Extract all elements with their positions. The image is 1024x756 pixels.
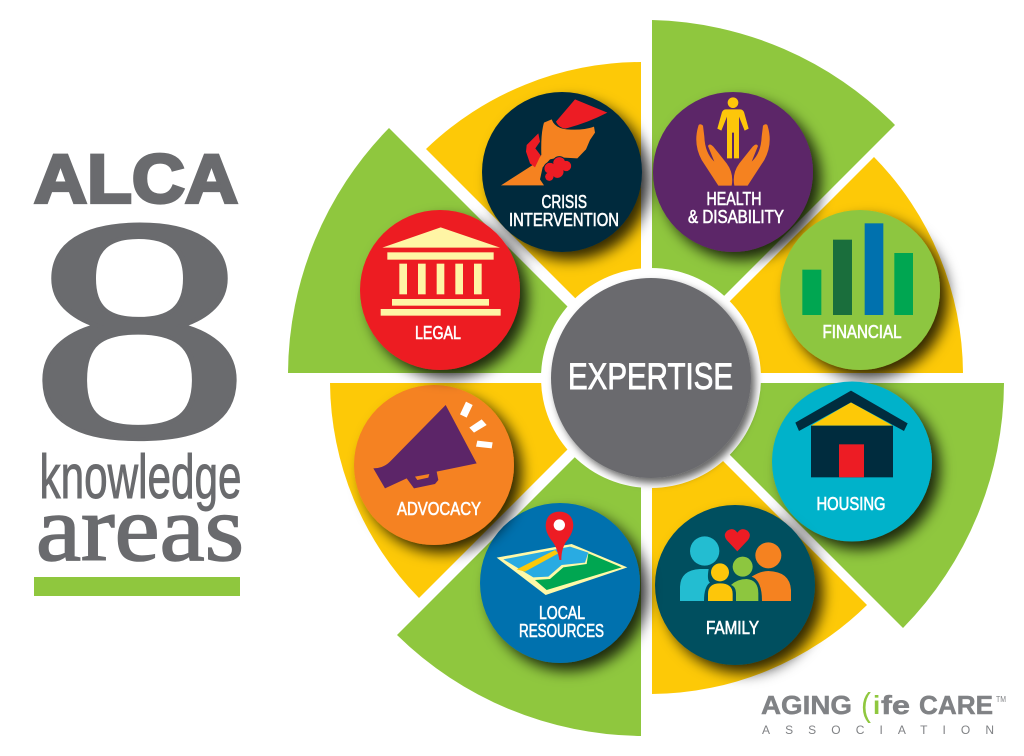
label: CRISIS bbox=[542, 192, 587, 212]
icon: map with pin bbox=[497, 512, 627, 595]
panel: advocacy bbox=[354, 385, 514, 545]
logo: Aging Life Care Association bbox=[761, 686, 1006, 737]
center hub: expertise bbox=[541, 268, 761, 488]
label: FAMILY bbox=[706, 618, 759, 638]
label: LEGAL bbox=[415, 323, 461, 343]
wheel wedges bbox=[288, 20, 1004, 736]
title: ALCA 8 knowledge areas bbox=[28, 140, 251, 581]
label: INTERVENTION bbox=[509, 210, 619, 230]
wedge: top right green bbox=[652, 20, 895, 368]
wedge: lower right yellow bbox=[652, 390, 867, 694]
panel: local resources bbox=[480, 503, 640, 663]
wedge: upper right yellow bbox=[658, 157, 963, 373]
wedge: bottom left green bbox=[397, 391, 641, 736]
panel: financial bbox=[780, 210, 940, 370]
panel: housing bbox=[772, 382, 932, 542]
wedge: top left yellow bbox=[426, 62, 641, 364]
label: & DISABILITY bbox=[688, 207, 784, 227]
heading: ALCA: ALCA bbox=[34, 140, 238, 218]
center hub: expertise: EXPERTISE bbox=[568, 356, 733, 397]
icon: house bbox=[795, 391, 908, 477]
logo: Aging Life Care Association: fe bbox=[881, 690, 910, 720]
logo: Aging Life Care Association: ( bbox=[861, 686, 871, 723]
subheading: knowledge: knowledge bbox=[40, 443, 242, 512]
icon: bar chart bbox=[802, 223, 913, 315]
label: HOUSING bbox=[816, 494, 886, 514]
icon: family group bbox=[680, 529, 791, 601]
label: ADVOCACY bbox=[397, 499, 481, 519]
green accent bar bbox=[34, 577, 240, 596]
wedge: left green bbox=[288, 128, 634, 373]
logo: Aging Life Care Association: CARE bbox=[919, 690, 993, 720]
logo: Aging Life Care Association: i bbox=[873, 690, 880, 720]
icon: person in hands bbox=[696, 97, 770, 186]
icon: helping hands bbox=[501, 99, 607, 185]
panel: family bbox=[655, 505, 815, 665]
label: LOCAL bbox=[539, 603, 585, 623]
logo: Aging Life Care Association: TM bbox=[996, 695, 1006, 704]
subheading: areas: areas bbox=[36, 477, 244, 581]
panel: health and disability bbox=[653, 92, 813, 252]
label: FINANCIAL bbox=[822, 322, 902, 342]
label: HEALTH bbox=[706, 189, 762, 209]
icon: courthouse bbox=[381, 227, 501, 316]
panel: legal bbox=[360, 210, 520, 370]
wedge: right green bbox=[658, 383, 1004, 628]
panel: crisis intervention bbox=[482, 92, 642, 252]
logo: Aging Life Care Association: AGING bbox=[761, 690, 852, 720]
icon: megaphone bbox=[373, 402, 493, 488]
label: RESOURCES bbox=[519, 621, 604, 641]
wedge: lower left yellow bbox=[330, 383, 634, 598]
logo: Aging Life Care Association: ASSOCIATION bbox=[762, 723, 994, 737]
numeral: 8: 8 bbox=[28, 152, 251, 505]
